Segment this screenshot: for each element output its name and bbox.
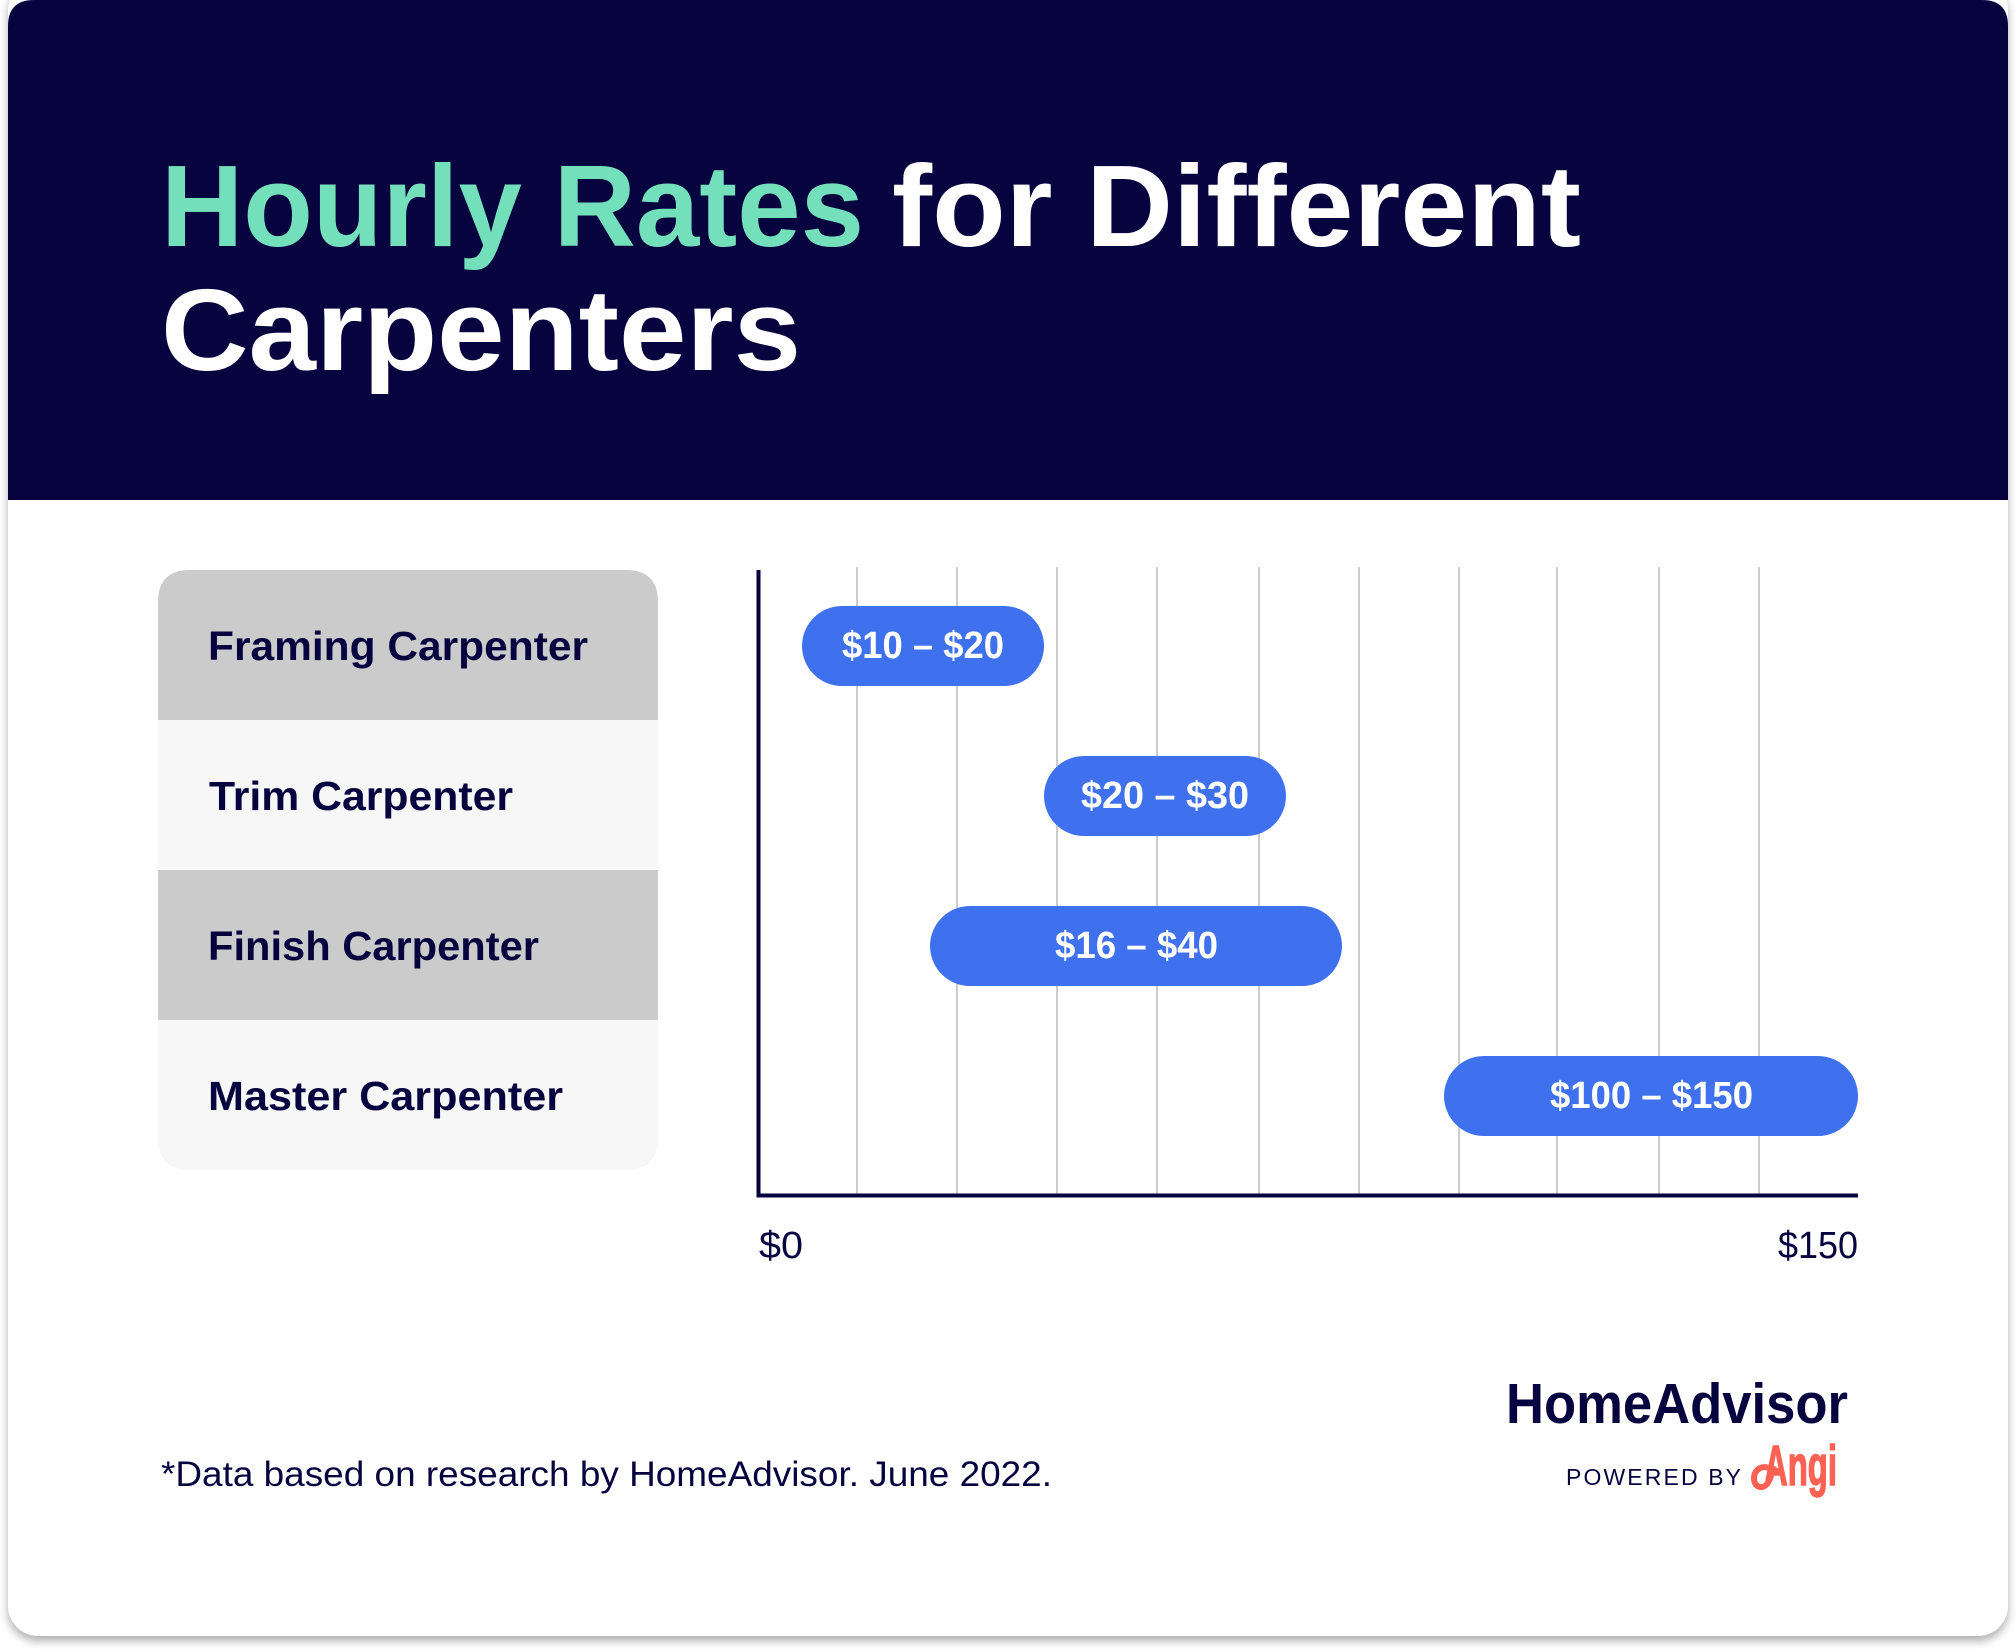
wordmark: Angi: Angi xyxy=(1764,1434,1837,1498)
title: for Different xyxy=(892,141,1581,271)
bar: trim $20-$30: $20 – $30 xyxy=(1081,775,1249,817)
bar: finish $16-$40 xyxy=(930,906,1342,986)
axis label: $150: $150 xyxy=(1778,1225,1858,1267)
bar: master $100-$150: $100 – $150 xyxy=(1550,1075,1753,1117)
title: Carpenters xyxy=(161,265,801,395)
row: trim carpenter xyxy=(158,720,658,870)
axis label: $0: $0 xyxy=(759,1225,803,1267)
bar: framing $10-$20 xyxy=(802,606,1044,686)
row: framing carpenter: Framing Carpenter xyxy=(208,623,588,669)
bar: trim $20-$30 xyxy=(1044,756,1286,836)
row: finish carpenter: Finish Carpenter xyxy=(208,923,539,969)
logo: HomeAdvisor powered by Angi xyxy=(1506,1372,1848,1498)
bar: framing $10-$20: $10 – $20 xyxy=(842,625,1004,667)
row: trim carpenter: Trim Carpenter xyxy=(209,773,513,819)
bar: master $100-$150 xyxy=(1444,1056,1858,1136)
axes xyxy=(758,570,1858,1196)
title: Hourly Rates xyxy=(161,141,864,271)
bar: finish $16-$40: $16 – $40 xyxy=(1055,925,1218,967)
header band xyxy=(8,0,2008,500)
footnote: *Data based on research by HomeAdvisor. June 2022. xyxy=(161,1455,1052,1494)
text: powered by: POWERED BY xyxy=(1566,1464,1741,1490)
title xyxy=(161,141,1581,395)
row: master carpenter: Master Carpenter xyxy=(208,1073,563,1119)
row: master carpenter xyxy=(158,1020,658,1170)
row: framing carpenter xyxy=(158,570,658,720)
row: finish carpenter xyxy=(158,870,658,1020)
wordmark: Angi xyxy=(1754,1434,1837,1498)
wordmark: HomeAdvisor: HomeAdvisor xyxy=(1506,1372,1848,1436)
chart: hourly rate ranges xyxy=(758,567,1858,1267)
panel: carpenter types table xyxy=(158,570,658,1170)
